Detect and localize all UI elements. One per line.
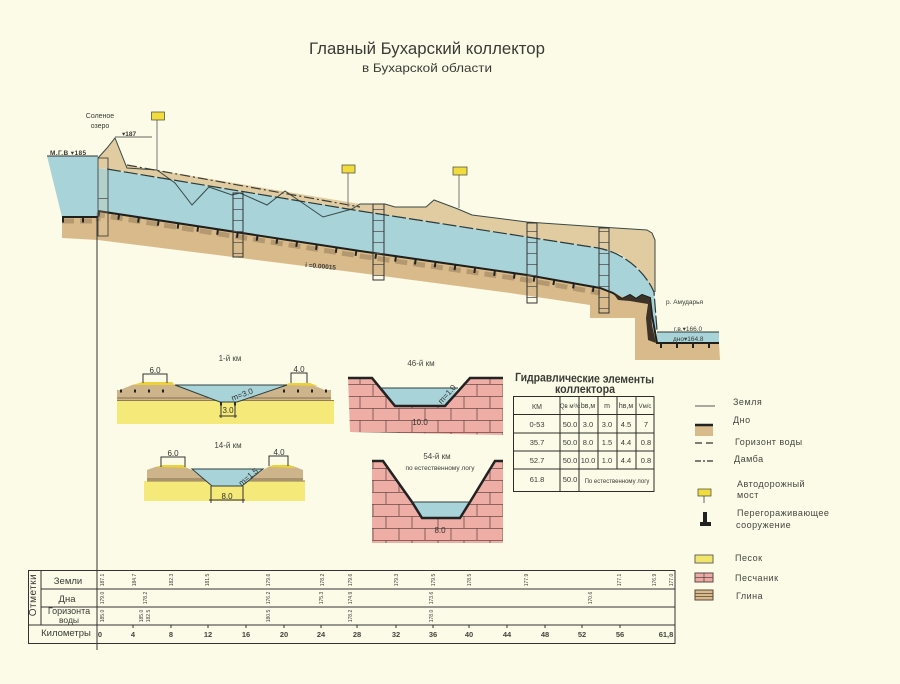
dimensions — [161, 456, 288, 503]
kilometre labels: 32 — [392, 630, 400, 639]
legend: dam: Дамба — [734, 454, 764, 464]
legend: ground — [695, 397, 762, 407]
cross-section: 54th km — [372, 452, 503, 543]
kilometre labels: 12 — [204, 630, 212, 639]
title — [309, 39, 545, 75]
table grid — [28, 570, 675, 644]
clay and embankments — [147, 466, 303, 486]
table text: 7 — [644, 420, 648, 429]
hydraulic elements table: коллектора — [555, 382, 615, 396]
table heading: Гидравлические элементы — [515, 370, 654, 386]
bridge markers — [152, 112, 467, 208]
dimensions — [143, 373, 307, 418]
cross-section: 1st km: 4.0 — [293, 365, 305, 374]
kilometre labels: 56 — [616, 630, 624, 639]
elevation and kilometre table — [28, 570, 675, 644]
kilometre labels: 36 — [429, 630, 437, 639]
legend: bed: Дно — [733, 415, 751, 425]
vertical reference line — [96, 217, 98, 650]
bed elevations: 173.6 — [429, 592, 435, 604]
table text: 4.4 — [621, 456, 631, 465]
table text: 10.0 — [581, 456, 595, 465]
cross-section: 46th km — [348, 359, 503, 435]
legend: sandstone: Песчаник — [735, 573, 779, 583]
row titles: Земли — [54, 576, 82, 587]
legend: bed — [695, 415, 751, 436]
ground elevations: 177.9 — [524, 574, 530, 586]
water — [175, 385, 287, 402]
table grid — [514, 396, 654, 492]
kilometre labels: 61,8 — [659, 630, 673, 639]
table text: Qв м³/с — [560, 404, 580, 410]
ground elevations: 179.6 — [266, 574, 272, 586]
legend: sandstone — [695, 573, 779, 583]
row titles: Горизонта — [48, 606, 90, 616]
water horizon elevations: 180.5 — [266, 610, 272, 622]
kilometre labels: 48 — [541, 630, 549, 639]
ground elevations: 177.0 — [669, 574, 675, 586]
row titles: Отметки — [28, 574, 39, 616]
legend: barrier structure: Перегораживающее — [737, 508, 829, 518]
row titles: воды — [59, 615, 79, 625]
cross-section: 14th km: m=1.5 — [237, 466, 260, 488]
water — [192, 469, 263, 486]
table text: 3.0 — [583, 420, 593, 429]
table text: 0.8 — [641, 456, 651, 465]
ground elevations — [100, 574, 675, 586]
hydraulic elements table — [514, 370, 654, 492]
bed elevations: 178.2 — [143, 592, 149, 604]
kilometre labels: 4 — [131, 630, 136, 639]
table text: 50.0 — [563, 438, 577, 447]
legend: ground: Земля — [733, 397, 762, 407]
water horizon elevations: 178.2 — [348, 610, 354, 622]
cross-section: 1st km — [117, 354, 334, 424]
cross-section: 54th km: по естественному логу — [405, 465, 475, 472]
table text: 0.8 — [641, 438, 651, 447]
water horizon elevations: 182.5 — [146, 610, 152, 622]
table text: Vм/с — [639, 404, 651, 410]
surface and natural ground lines — [47, 137, 719, 332]
table text: 0-53 — [529, 420, 545, 429]
table text: 52.7 — [530, 456, 544, 465]
cross-section: 14th km — [144, 441, 305, 503]
profile labels: озеро — [91, 123, 109, 130]
table text: 3.0 — [602, 420, 612, 429]
bed line — [348, 378, 503, 406]
water body: collector — [98, 168, 657, 330]
water horizon elevations: 185.0 — [100, 610, 106, 622]
cross-section: 14th km: 4.0 — [273, 448, 285, 457]
water horizon elevations: 178.0 — [429, 610, 435, 622]
legend: water horizon — [695, 437, 803, 447]
table text: 4.5 — [621, 420, 631, 429]
ground elevations: 179.5 — [431, 574, 437, 586]
table text: 8.0 — [583, 438, 593, 447]
legend: road bridge: Автодорожный — [737, 479, 805, 489]
table text: КМ — [532, 404, 542, 411]
bed hatching and teeth — [62, 211, 719, 345]
table text: 50.0 — [563, 475, 577, 484]
table text: 61.8 — [530, 475, 544, 484]
sand layer — [144, 481, 305, 501]
kilometre labels: 0 — [98, 630, 102, 639]
row titles: Километры — [41, 628, 91, 639]
row titles — [28, 574, 91, 639]
legend: barrier structure — [700, 508, 829, 530]
ground elevations: 179.6 — [348, 574, 354, 586]
water — [412, 502, 470, 518]
kilometre labels: 20 — [280, 630, 288, 639]
clay and embankments — [117, 383, 331, 402]
kilometre labels — [98, 630, 673, 639]
profile labels: Соленое — [86, 113, 114, 120]
sandstone — [348, 378, 503, 435]
longitudinal profile chart — [47, 112, 720, 360]
table text — [529, 403, 651, 485]
legend: road bridge — [698, 479, 805, 503]
table text: По естественному логу — [585, 479, 649, 485]
kilometre ticks — [133, 625, 620, 628]
cross-section: 46th km: m=1.0 — [436, 383, 458, 406]
table text: hв,м — [619, 403, 633, 410]
kilometre labels: 8 — [169, 630, 173, 639]
table text: 35.7 — [530, 438, 544, 447]
profile labels: М.Г.В ▾185 — [50, 150, 87, 157]
cross-section: 1st km: m=3.0 — [230, 386, 255, 403]
cross-section: 14th km: 6.0 — [167, 449, 179, 458]
kilometre labels: 44 — [503, 630, 512, 639]
dimension: 8.0 — [434, 526, 446, 535]
bed elevations: 170.6 — [588, 592, 594, 604]
cross-section: 14th km: 8.0 — [221, 492, 233, 501]
table text: m — [604, 403, 610, 410]
kilometre labels: 16 — [242, 630, 250, 639]
ground elevations: 176.9 — [652, 574, 658, 586]
profile labels: г.в.▾166.0 — [674, 326, 703, 333]
heading: 14-й км — [214, 441, 242, 450]
title: Главный Бухарский коллектор — [309, 39, 545, 58]
legend: sand: Песок — [735, 553, 763, 563]
legend: road bridge: мост — [737, 490, 759, 500]
land surface above water — [98, 138, 655, 292]
ground elevations: 178.2 — [320, 574, 326, 586]
profile labels: дно▾164.8 — [673, 336, 704, 343]
legend: water horizon: Горизонт воды — [735, 437, 803, 447]
sand layer — [117, 400, 334, 424]
water horizon elevations: 185.0 — [139, 610, 145, 622]
table text: 1.0 — [602, 456, 612, 465]
ground elevations: 178.5 — [467, 574, 473, 586]
bed line — [372, 461, 503, 518]
dimensions: 10.0 — [412, 418, 428, 427]
profile labels: i =0.00015 — [305, 262, 337, 272]
heading: 1-й км — [219, 354, 241, 363]
kilometre labels: 52 — [578, 630, 586, 639]
legend — [695, 397, 829, 601]
ground elevations: 181.5 — [205, 574, 211, 586]
water body: Amu Darya river — [657, 332, 719, 343]
kilometre labels: 24 — [317, 630, 326, 639]
row titles: Дна — [59, 594, 76, 605]
ground elevations: 187.1 — [100, 574, 106, 586]
table text: 1.5 — [602, 438, 612, 447]
heading: 54-й км — [423, 452, 451, 461]
bed elevations: 174.9 — [348, 592, 354, 604]
table text: bв,м — [581, 403, 595, 410]
heading: 46-й км — [407, 359, 435, 368]
ground elevations: 177.1 — [617, 574, 623, 586]
ground elevations: 182.3 — [169, 574, 175, 586]
bed elevations: 179.0 — [100, 592, 106, 604]
bed elevations: 176.2 — [266, 592, 272, 604]
table text: 50.0 — [563, 420, 577, 429]
bed elevations — [100, 592, 594, 604]
legend: dam — [695, 454, 764, 464]
ground elevations: 184.7 — [132, 574, 138, 586]
water horizon elevations — [100, 610, 435, 622]
water — [380, 388, 458, 406]
profile labels: р. Амударья — [666, 299, 704, 306]
water body: Salt lake — [47, 156, 98, 217]
ground elevations: 179.3 — [394, 574, 400, 586]
boreholes — [98, 158, 609, 313]
cross-section: 1st km: 3.0 — [222, 406, 234, 415]
legend: sand — [695, 553, 763, 563]
table text: 50.0 — [563, 456, 577, 465]
profile labels — [50, 113, 704, 343]
legend: clay — [695, 590, 763, 601]
kilometre labels: 40 — [465, 630, 473, 639]
sandstone — [372, 461, 503, 543]
cross-section: 1st km: 6.0 — [149, 366, 161, 375]
bed elevations: 175.3 — [319, 592, 325, 604]
legend: barrier structure: сооружение — [736, 520, 791, 530]
profile labels: ▾187 — [122, 131, 136, 138]
legend: clay: Глина — [736, 591, 763, 601]
ground layer under the collector — [62, 211, 720, 360]
title: в Бухарской области — [362, 61, 492, 75]
kilometre labels: 28 — [353, 630, 361, 639]
table text: 4.4 — [621, 438, 631, 447]
